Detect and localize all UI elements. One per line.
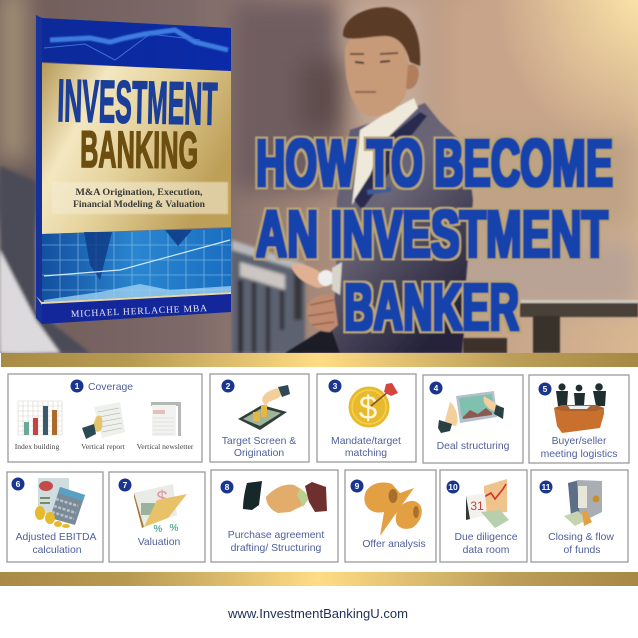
- step 2: target screen: Origination: [234, 448, 284, 459]
- step 7: valuation: Valuation: [138, 537, 180, 548]
- book cover: BANKING: [80, 121, 198, 180]
- step 5: buyer/seller meeting: [529, 375, 629, 463]
- step 6: adjusted EBITDA: 6: [16, 479, 21, 489]
- step 6: adjusted EBITDA: Adjusted EBITDA: [16, 532, 96, 543]
- hero title: [256, 126, 613, 345]
- icon: handshake: [243, 481, 327, 513]
- icon: calculator and coins: [35, 478, 85, 528]
- icon: tablet with coins and hand: [238, 385, 290, 430]
- step 5: buyer/seller meeting: Buyer/seller: [552, 436, 607, 447]
- step 3: mandate/target: Mandate/target: [331, 436, 401, 447]
- step 7: valuation: [109, 472, 205, 562]
- top gold bar: [1, 353, 638, 367]
- icon: calendar, chart and cash: 31: [470, 499, 484, 513]
- step 11: closing: Closing & flow: [548, 532, 614, 543]
- step 11: closing: [531, 470, 628, 562]
- step 5: buyer/seller meeting: 5: [543, 384, 548, 394]
- icon: folder with money: %: [170, 523, 179, 534]
- icon: folder with money: %: [154, 524, 163, 535]
- book tagline: M&A Origination, Execution,: [76, 188, 202, 198]
- step 8: purchase agreement: 8: [225, 482, 230, 492]
- icon: bar chart: [18, 401, 62, 435]
- cover chart lines: [50, 30, 228, 50]
- icon: meeting table with silhouettes: [554, 383, 606, 433]
- step 1: coverage: Index building: [15, 442, 59, 451]
- icon: folder with money: $: [156, 488, 168, 510]
- step 2: target screen: Target Screen &: [222, 436, 296, 447]
- step 5: buyer/seller meeting: meeting logistics: [541, 449, 617, 460]
- railing right: [463, 300, 638, 353]
- step 8: purchase agreement: drafting/ Structuring: [231, 543, 322, 554]
- step 4: deal structuring: 4: [434, 383, 439, 393]
- book tagline: Financial Modeling & Valuation: [73, 200, 206, 210]
- icon: folder with money: [134, 484, 187, 535]
- step 10: due diligence: Due diligence: [455, 532, 518, 543]
- bottom gold bar: [0, 572, 638, 586]
- book cover: [36, 15, 231, 324]
- icon: safe with cash: [564, 480, 602, 526]
- step 9: offer analysis: [345, 470, 436, 562]
- step 1: coverage: [8, 374, 202, 462]
- icon: percent symbol: [364, 482, 422, 536]
- step 7: valuation: 7: [123, 480, 128, 490]
- icon: vertical newsletter: [151, 402, 181, 436]
- step 1: coverage: Coverage: [88, 382, 133, 393]
- step 9: offer analysis: 9: [355, 481, 360, 491]
- person in suit: [285, 7, 473, 353]
- book spine: [36, 15, 42, 324]
- step 4: deal structuring: Deal structuring: [437, 441, 510, 452]
- step 3: mandate/target: 3: [333, 381, 338, 391]
- website url: www.InvestmentBankingU.com: [227, 607, 408, 621]
- infographic canvas: INVESTMENT: [57, 67, 218, 138]
- step 6: adjusted EBITDA: [7, 472, 103, 562]
- icon: vertical report: [82, 402, 125, 439]
- icon: dollar coin with dart: $: [359, 389, 377, 426]
- step 4: deal structuring: [423, 375, 523, 463]
- icon: hands holding chart tablet: [438, 391, 504, 433]
- title line 3: BANKER: [344, 270, 519, 345]
- step 11: closing: of funds: [564, 545, 600, 556]
- book tagline: [73, 188, 206, 210]
- step 3: mandate/target: matching: [345, 448, 387, 459]
- step 10: due diligence: data room: [463, 545, 509, 556]
- hero photo background: [0, 0, 638, 355]
- white lower panel: [0, 353, 638, 638]
- step 8: purchase agreement: [211, 470, 338, 562]
- step 8: purchase agreement: Purchase agreement: [228, 530, 324, 541]
- step 1: coverage: Vertical newsletter: [137, 442, 194, 451]
- step 9: offer analysis: Offer analysis: [362, 539, 426, 550]
- step 3: mandate/target: [317, 374, 416, 462]
- step 2: target screen: 2: [226, 381, 231, 391]
- step 10: due diligence: 10: [448, 482, 458, 492]
- step 10: due diligence: [440, 470, 527, 562]
- step 2: target screen: [210, 374, 309, 462]
- book author: MICHAEL HERLACHE MBA: [71, 303, 208, 320]
- step 1: coverage: 1: [75, 381, 80, 391]
- step 1: coverage: Vertical report: [81, 442, 126, 451]
- hands and watch: [291, 264, 328, 288]
- step 6: adjusted EBITDA: calculation: [32, 545, 82, 556]
- step 11: closing: 11: [542, 482, 551, 492]
